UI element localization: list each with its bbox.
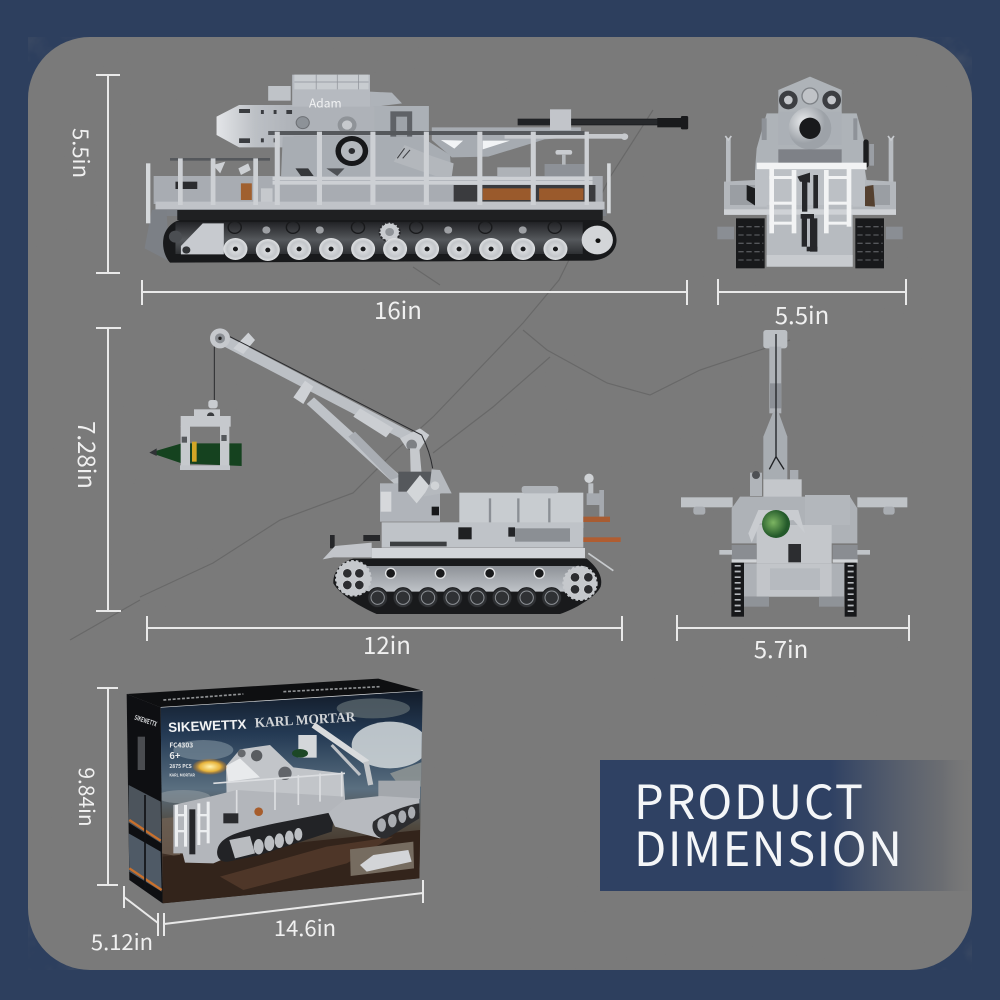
crane boom: [210, 328, 433, 495]
dimension: crane width 5.7in: 5.7in: [754, 630, 808, 665]
dimension: mortar length 16in: 16in: [374, 291, 422, 326]
turret and mortar body: [217, 75, 454, 180]
tracks: [717, 218, 903, 268]
dimension: box depth 5.12in: [91, 886, 158, 957]
dimension: mortar height 5.5in: 5.5in: [66, 128, 98, 178]
tracks and running gear: [163, 210, 617, 263]
label: Adam: Adam: [309, 95, 342, 112]
banner: product dimension title: [600, 760, 972, 891]
dimension: crane height 7.28in: [71, 328, 121, 611]
crane base: [380, 469, 452, 522]
box text: model details: [169, 740, 195, 778]
vehicle: Karl mortar side view: [145, 75, 688, 263]
railings: [170, 132, 593, 205]
box text: brand: SIKEWETTX: [168, 717, 247, 735]
dimension: mortar width 5.5in: [718, 279, 906, 331]
dimension: box height 9.84in: 9.84in: [72, 767, 102, 827]
dimension: box width 14.6in: [164, 880, 423, 943]
gun barrel: [518, 109, 688, 130]
dimension: box width 14.6in: 14.6in: [274, 911, 336, 943]
dimension: mortar width 5.5in: 5.5in: [775, 296, 829, 331]
box top and side: SIKEWETTX: [133, 712, 159, 729]
spare wheels: [268, 116, 585, 166]
dimension: crane length 12in: 12in: [363, 626, 411, 661]
turret front: [755, 77, 874, 170]
vehicle: crane carrier side view: [149, 328, 621, 614]
box text: model details: 2875 PCS: [169, 763, 192, 770]
box text: model details: FC4303: [169, 740, 193, 750]
carrier superstructure: [323, 474, 621, 571]
box front artwork: [157, 690, 428, 910]
box text: set name: KARL MORTAR: [254, 710, 357, 731]
hull front: [724, 136, 896, 267]
boom head-on: [763, 330, 787, 480]
dimension: mortar length 16in: [142, 280, 687, 326]
dimension: crane height 7.28in: 7.28in: [71, 421, 106, 489]
dimension: mortar height 5.5in: [66, 75, 120, 273]
suspended shell and clamp: [149, 400, 242, 470]
gun cradle truss: [432, 127, 628, 177]
vehicle: Karl mortar front view: [717, 77, 903, 268]
ladders and tools: [757, 163, 867, 252]
carrier body front: [681, 470, 907, 597]
hull: [145, 163, 611, 262]
carrier tracks and wheels: [333, 559, 601, 614]
dimension: crane width 5.7in: [677, 615, 909, 665]
mortar on box art: [173, 745, 345, 863]
dimension: box height 9.84in: [72, 688, 118, 885]
box top and side: [127, 679, 423, 903]
dimension: box depth 5.12in: 5.12in: [91, 925, 153, 957]
crane on box art: [292, 725, 420, 839]
carrier tracks: [731, 563, 857, 617]
inset photo on box art: [350, 842, 414, 876]
box text: model details: KARL MORTAR: [169, 773, 195, 778]
heading line 2: DIMENSION: [634, 811, 902, 880]
box text: model details: 6+: [169, 748, 181, 762]
heading line 1: PRODUCT: [634, 764, 863, 833]
dimension: crane length 12in: [147, 616, 622, 661]
product box: [127, 679, 428, 910]
vehicle: crane carrier front view: [681, 330, 907, 617]
